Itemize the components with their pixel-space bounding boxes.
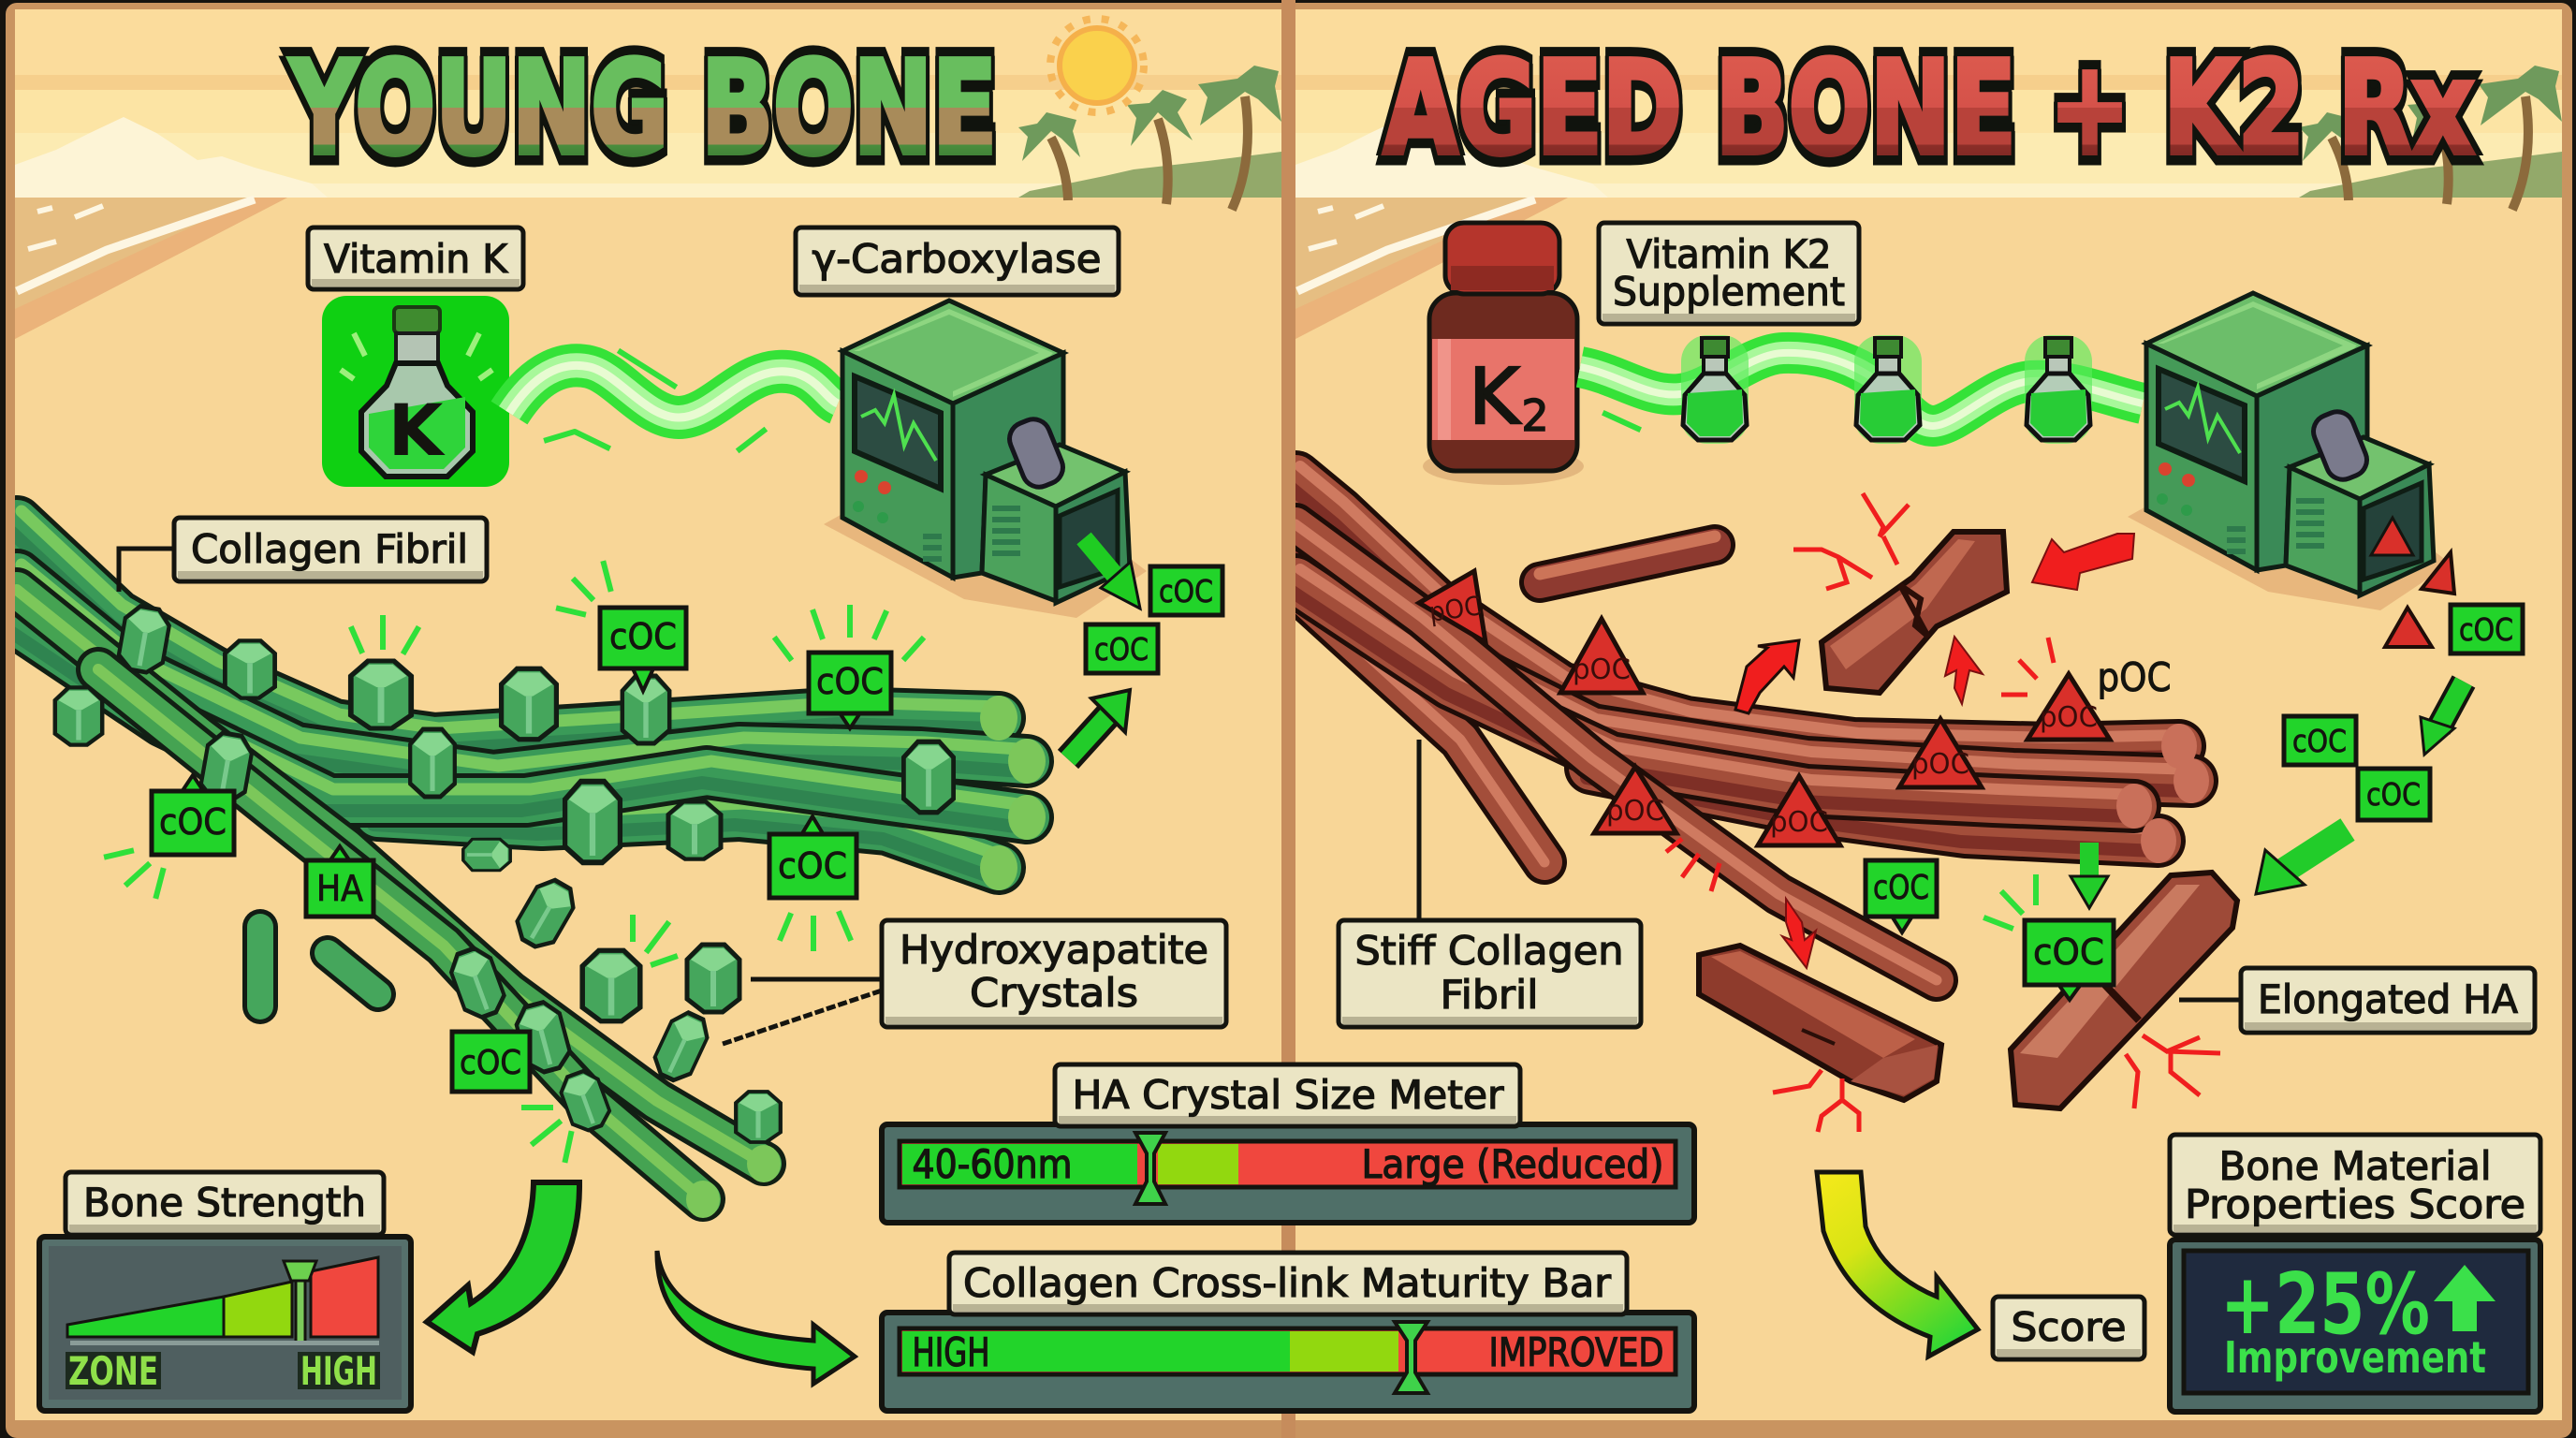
icon: enzyme machine: [824, 301, 1147, 618]
triangle: poc one: [1419, 571, 1486, 642]
meter: collagen cross-link maturity: [882, 1313, 1694, 1411]
tag: coc near machine: [1150, 566, 1222, 615]
label: collagen cross-link maturity bar: [949, 1253, 1627, 1314]
meter: collagen cross-link maturity: IMPROVED: [1488, 1329, 1664, 1375]
tag: coc lower: cOC: [460, 1044, 521, 1082]
label: gamma carboxylase: γ-Carboxylase: [812, 236, 1101, 282]
triangle: poc one: pOC: [1427, 590, 1484, 628]
centre divider: [1281, 0, 1295, 1438]
arrow: machine output: [1084, 538, 1140, 609]
tag: coc top right: [2451, 605, 2523, 653]
label: hydroxyapatite crystals with leaders: Hydroxyapatite: [900, 927, 1208, 973]
triangle: poc six: [1758, 776, 1840, 845]
arrow: red down: [1782, 899, 1816, 968]
arrow: red up right: [1735, 640, 1799, 713]
label: vitamin k2 supplement: Supplement: [1613, 269, 1845, 315]
triangle: small poc near machine: [2422, 552, 2454, 594]
panel: aged bone: [1291, 223, 2540, 1412]
slider: maturity marker: [1395, 1322, 1427, 1393]
tag: coc on elongated ha: cOC: [2033, 932, 2104, 973]
tag: coc on fibril a: [600, 608, 686, 691]
label: vitamin k: [308, 227, 523, 289]
background: left beach scene: [15, 9, 1281, 339]
tag: coc near machine: cOC: [1159, 573, 1213, 609]
label: bone material properties score: Bone Material: [2218, 1143, 2492, 1189]
arrow: green down to coc: [2071, 843, 2108, 908]
triangle: poc four: pOC: [2040, 701, 2098, 734]
triangle: poc two: pOC: [1573, 653, 1631, 686]
tag: ha: HA: [316, 868, 363, 909]
panel: bone strength gauge: ZONE: [68, 1348, 158, 1394]
label: vitamin k: Vitamin K: [324, 236, 508, 282]
tag: coc lower right: cOC: [2366, 776, 2421, 813]
icon: enzyme machine with poc: [2128, 293, 2451, 610]
label: gamma carboxylase: [796, 227, 1119, 295]
arrow: to bone strength: [427, 1182, 579, 1352]
arrow: red to cracked bar from machine: [2032, 534, 2134, 590]
triangle: poc two: [1560, 619, 1643, 693]
crystal: elongated ha cracked: [2011, 873, 2237, 1108]
label: bone strength: Bone Strength: [83, 1180, 366, 1225]
triangle: poc five: pOC: [1606, 795, 1664, 828]
label: ha crystal size meter: [1055, 1064, 1520, 1126]
label: collagen cross-link maturity bar: Collagen Cross-link Maturity Bar: [963, 1260, 1612, 1306]
tag: coc on fibril: [1866, 860, 1937, 932]
icon: vial two: [1854, 335, 1922, 444]
label: stiff collagen fibril: Fibril: [1440, 972, 1539, 1018]
arrow: green curved from coc: [2421, 682, 2464, 755]
label: bone strength: [66, 1172, 384, 1235]
sparks: green binding activity: [107, 564, 922, 1160]
label: collagen fibril with leader: [119, 518, 487, 592]
label: score: Score: [2011, 1304, 2127, 1350]
icon: sun: [1050, 19, 1144, 112]
arrow: to collagen maturity bar: [657, 1251, 855, 1384]
panel: improvement score: +25%: [2220, 1255, 2430, 1354]
triangle: poc three: [1899, 719, 1982, 787]
triangle: small poc below machine: [2385, 608, 2432, 647]
tag: coc top right: cOC: [2459, 611, 2513, 648]
panel: bone strength gauge: HIGH: [300, 1348, 377, 1394]
panel: improvement score: Improvement: [2224, 1332, 2486, 1383]
tag: ha: [306, 846, 373, 917]
label: hydroxyapatite crystals with leaders: [723, 920, 1226, 1044]
tag: coc second: [1086, 624, 1158, 673]
label: vitamin k2 supplement: [1599, 223, 1859, 324]
triangle: poc three: pOC: [1911, 748, 1969, 781]
label: ha crystal size meter: HA Crystal Size Meter: [1073, 1072, 1504, 1118]
tag: coc lower: [452, 1032, 530, 1092]
crystal: cracked bar lower: [1699, 946, 1941, 1100]
tag: coc on fibril b: [809, 653, 891, 728]
panel: improvement score: [2170, 1240, 2540, 1412]
title: young bone: YOUNG BONE: [289, 39, 997, 188]
title: young bone: YOUNG BONE: [289, 30, 997, 179]
label: stiff collagen fibril: Stiff Collagen: [1355, 928, 1623, 974]
meter: collagen cross-link maturity: HIGH: [912, 1329, 990, 1375]
cracks: red fracture lines: [1666, 493, 2220, 1132]
title: young bone: YOUNG BONE: [289, 35, 997, 183]
meter: ha crystal size: Large (Reduced): [1361, 1141, 1664, 1187]
meter: ha crystal size: 40-60nm: [912, 1141, 1073, 1187]
label: bone material properties score: Properties Score: [2185, 1181, 2525, 1227]
tag: coc on fibril: cOC: [1873, 869, 1929, 907]
icon: k2 supplement bottle: K: [1469, 353, 1521, 442]
triangle: poc four: [2027, 674, 2110, 740]
icon: vitamin k bottle: [322, 296, 509, 487]
icon: k2 supplement bottle: [1423, 223, 1584, 485]
background: right beach scene: [1295, 9, 2562, 339]
tag: coc on fibril b: cOC: [816, 661, 884, 702]
tag: coc left: [152, 775, 234, 855]
label: score: [1993, 1297, 2144, 1359]
tag: coc lower right: [769, 816, 856, 898]
slider: ha marker: [1135, 1133, 1165, 1204]
fibril: stiff red collagen bundle: [1291, 466, 2209, 980]
tag: coc middle right: [2284, 716, 2356, 765]
crystals: hydroxyapatite: [55, 604, 954, 1142]
meter: ha crystal size: [882, 1124, 1694, 1223]
label: stiff collagen fibril: [1339, 740, 1641, 1027]
energy wave: k2 to enzyme: [1580, 353, 2143, 429]
tag: coc lower right: [2358, 769, 2430, 820]
text: free poc label: pOC: [2097, 654, 2172, 700]
label: hydroxyapatite crystals with leaders: Crystals: [970, 970, 1138, 1016]
arrow: upward right green: [1068, 690, 1130, 759]
triangle: poc six: pOC: [1770, 806, 1828, 839]
label: bone material properties score: [2170, 1135, 2540, 1235]
panel: young bone: [12, 227, 1226, 1411]
label: vitamin k2 supplement: Vitamin K2: [1627, 231, 1831, 277]
label: elongated ha: [2179, 968, 2535, 1033]
panel: bone strength gauge: [39, 1237, 411, 1411]
icon: vial three: [2025, 335, 2092, 444]
fibril: green collagen bundle: [12, 511, 1046, 1218]
tag: coc lower right: cOC: [778, 845, 847, 887]
tag: coc left: cOC: [159, 801, 227, 843]
icon: k2 supplement bottle: 2: [1521, 390, 1549, 441]
arrow: green to elongated ha: [2256, 829, 2348, 894]
crystal: intact elongated bar: [1540, 536, 1715, 582]
energy wave: vitamin k to enzyme: [509, 352, 838, 449]
label: collagen fibril with leader: Collagen Fibril: [191, 526, 468, 572]
tag: coc middle right: cOC: [2292, 723, 2347, 759]
arrow: red up: [1945, 637, 1983, 704]
tag: coc on fibril a: cOC: [609, 616, 677, 657]
icon: vitamin k bottle: K: [388, 389, 446, 472]
icon: vial one: [1681, 335, 1749, 444]
label: elongated ha: Elongated HA: [2258, 976, 2518, 1022]
crystal: cracked bar top: [1822, 532, 2007, 693]
triangle: poc five: [1594, 767, 1676, 833]
sparks: green near coc: [1986, 877, 2036, 928]
tag: coc on elongated ha: [2025, 920, 2114, 1000]
arrow: yellow to score: [1817, 1172, 1978, 1357]
tag: coc second: cOC: [1094, 631, 1149, 668]
